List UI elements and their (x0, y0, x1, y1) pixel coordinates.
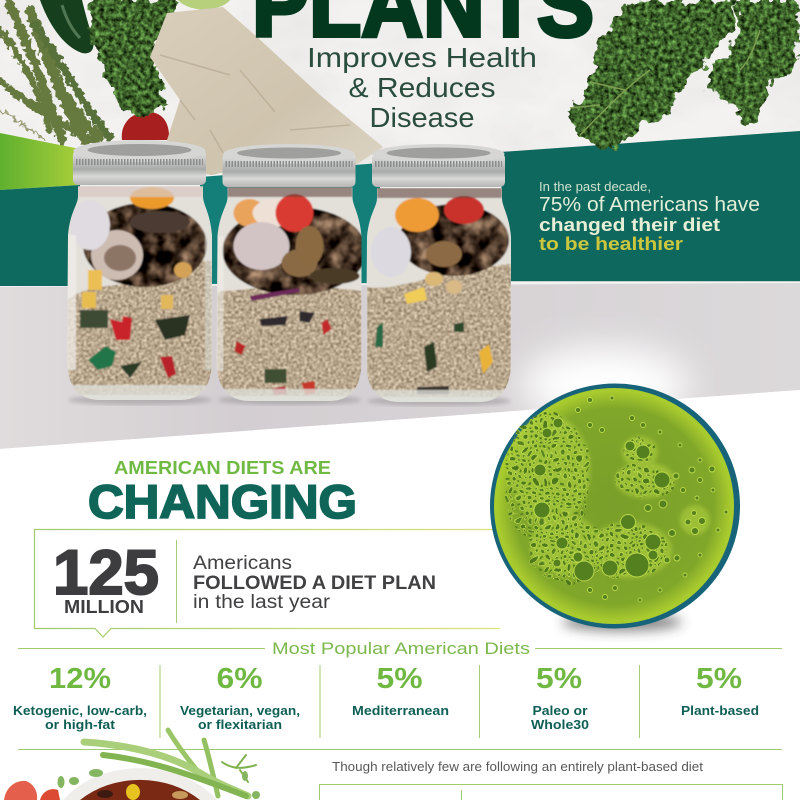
divider line (18, 748, 782, 750)
white section (0, 390, 800, 800)
teal band right (500, 131, 800, 282)
teal band left (0, 185, 80, 286)
parsley kale left (92, 0, 176, 122)
callout: 75 percent of Americans: to be healthier (539, 233, 683, 254)
most popular diets heading: Most Popular American Diets (272, 639, 530, 658)
stat description: FOLLOWED A DIET PLAN (193, 573, 436, 594)
diet: plant-based: 5% (696, 663, 742, 695)
plant-based note: Though relatively few are following an entirely plant-based diet (332, 760, 704, 774)
diet: mediterranean: Mediterranean (352, 704, 449, 718)
green onions (84, 730, 256, 796)
herb flecks (58, 769, 260, 799)
big number: 125 (53, 538, 159, 608)
diet: mediterranean: 5% (376, 663, 423, 695)
tomato pieces (4, 781, 37, 800)
stat description: Americans (193, 553, 292, 574)
green smoothie (490, 384, 740, 631)
jar 1 (60, 140, 220, 405)
subtitle (307, 42, 537, 133)
diet: paleo: Whole30 (531, 718, 589, 732)
bowl (63, 768, 217, 800)
diet: vegetarian (180, 663, 300, 732)
red tomato (122, 112, 169, 140)
subtitle: & Reduces (348, 72, 496, 103)
diet: ketogenic: Ketogenic, low-carb, (13, 704, 147, 718)
diet: ketogenic: 12% (49, 663, 111, 695)
section heading: CHANGING (88, 475, 357, 528)
teal band middle (200, 163, 380, 284)
stat description: in the last year (193, 592, 331, 613)
lower stat box (320, 784, 782, 800)
jar 2 (210, 144, 370, 405)
diet: vegetarian: 6% (216, 663, 263, 695)
stat box: 125 million (34, 530, 500, 637)
thyme sprigs (0, 0, 110, 142)
callout: 75 percent of Americans: 75% of Americans have (539, 194, 760, 216)
callout: 75 percent of Americans: changed their diet (539, 214, 720, 235)
diet: plant-based (681, 663, 759, 718)
title (252, 0, 594, 133)
diet statistics (13, 663, 759, 738)
soup ingredients (97, 784, 188, 800)
diet: paleo: 5% (536, 663, 582, 695)
jar 3 (359, 144, 519, 406)
diet: mediterranean (352, 663, 449, 718)
stat description (193, 553, 436, 613)
section heading: AMERICAN DIETS ARE (114, 458, 331, 478)
diet: ketogenic: or high-fat (45, 718, 116, 732)
photo background (0, 0, 800, 300)
diet: paleo: Paleo or (532, 704, 588, 718)
paper bag (150, 7, 383, 175)
jalapeno pepper (40, 0, 94, 53)
soup (80, 780, 200, 800)
subtitle: Disease (370, 102, 474, 133)
green apple (178, 0, 230, 10)
diet: vegetarian: or flexitarian (198, 718, 282, 732)
counter surface (0, 282, 800, 449)
glow behind smoothie (520, 347, 690, 423)
diet: paleo (531, 663, 589, 732)
diet: vegetarian: Vegetarian, vegan, (180, 704, 300, 718)
green accent band (0, 133, 80, 190)
stat box: 125 million: MILLION (64, 597, 144, 617)
subtitle: Improves Health (307, 42, 537, 73)
diet: plant-based: Plant-based (681, 704, 759, 718)
callout: 75 percent of Americans (539, 179, 760, 254)
kale right (564, 0, 800, 151)
callout: 75 percent of Americans: In the past decade, (539, 179, 651, 194)
diet: ketogenic (13, 663, 147, 732)
soup bowl illustration (4, 730, 260, 800)
jars (60, 140, 519, 406)
